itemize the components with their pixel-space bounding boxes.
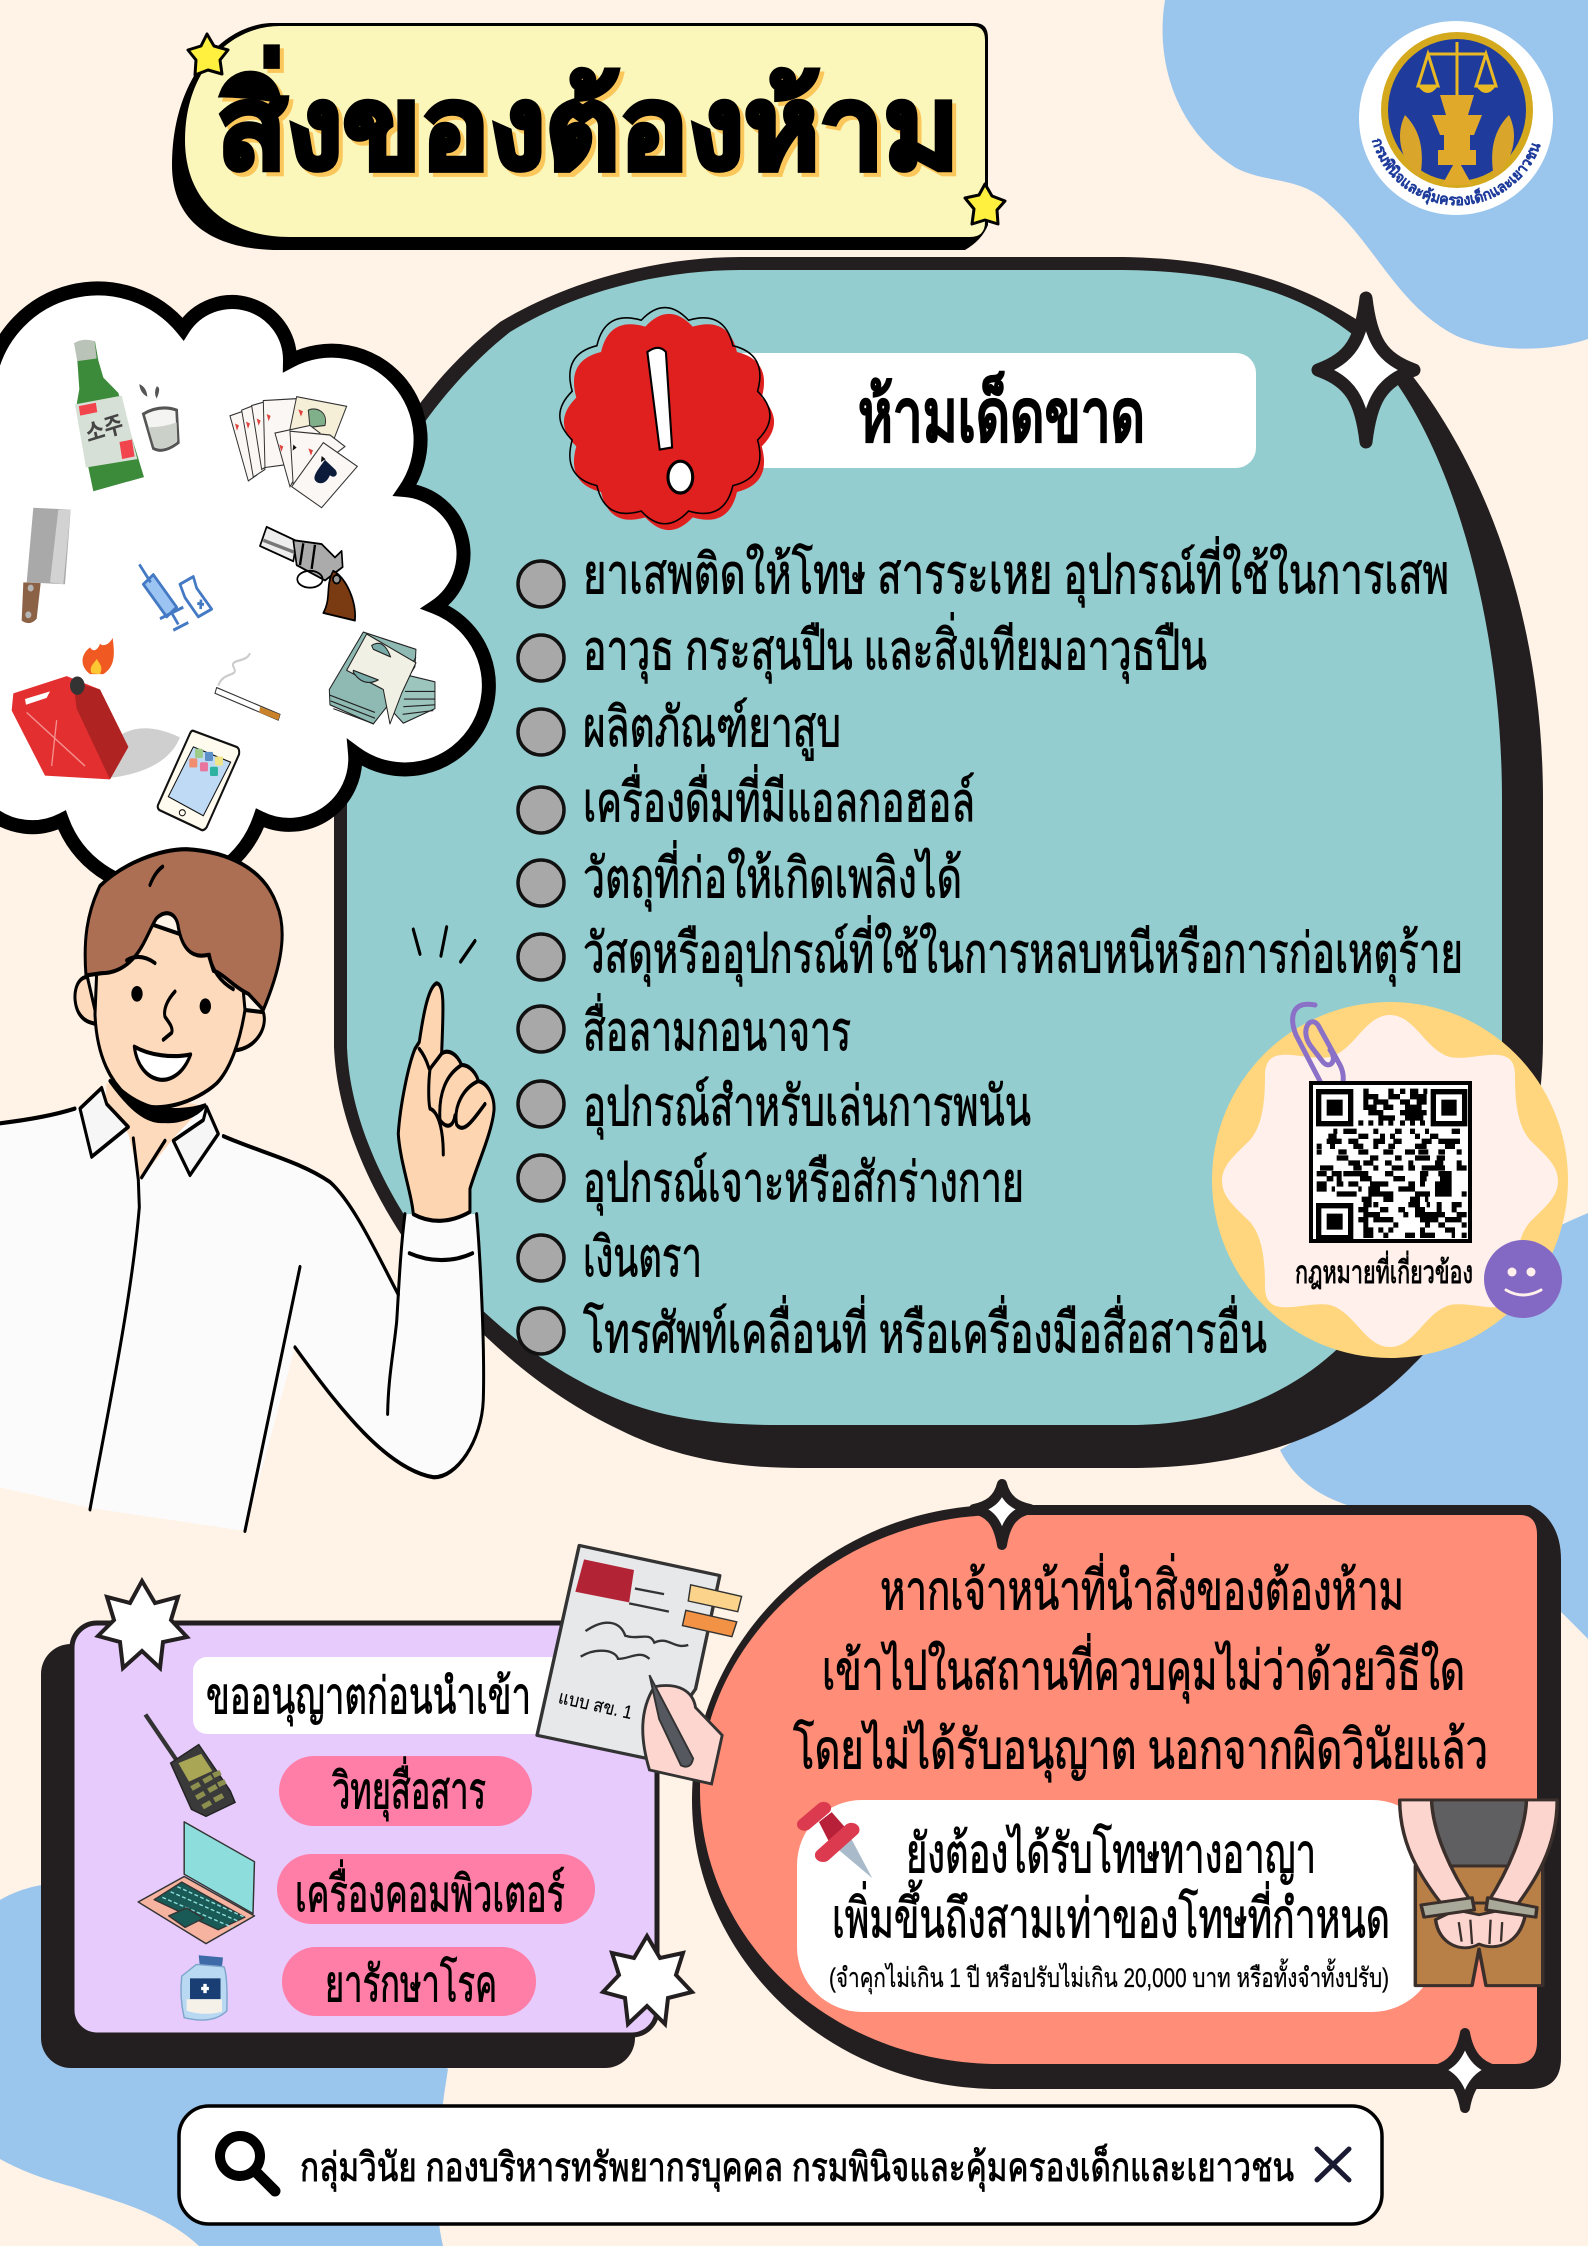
icon: smartphone [158,731,239,830]
icon: fuel can with flame [12,638,180,779]
illustration: signing form: แบบ สข. 1 [556,1688,634,1724]
thought cloud [0,288,489,889]
title text: สิ่งของต้องห้าม [221,51,963,197]
cloud icons [12,340,435,830]
mouth [134,1047,191,1080]
panel: permission request [41,1581,692,2068]
icon: paperclip [1293,1004,1343,1093]
icon: shot glass [139,384,178,450]
icon: cash stack [329,632,435,724]
list text: อุปกรณ์เจาะหรือสักร่างกาย [583,1151,1024,1216]
icon: playing cards [230,397,357,508]
icon: cigarette [215,653,280,720]
icon: smiley [1484,1240,1562,1318]
panel: penalty warning [692,1484,1561,2108]
man illustration [0,849,494,1531]
neck [105,1083,203,1180]
heading label [193,1657,578,1734]
hand [398,983,494,1221]
list text: วัตถุที่ก่อให้เกิดเพลิงได้ [583,840,962,912]
shirt lines [0,1109,484,1531]
icon: close x [1317,2149,1349,2180]
pill: medicine: ยารักษาโรค [325,1956,497,2012]
ears [75,977,98,1025]
decorative sparkle [1318,298,1414,442]
blue blob mid right [1280,1213,1588,1639]
star top left [98,1581,187,1668]
icon: revolver [260,527,355,621]
heading text: ห้ามเด็ดขาด [858,372,1145,457]
penalty text: ยังต้องได้รับโทษทางอาญา [906,1823,1316,1884]
icon: star right [965,184,1005,224]
QR badge [1212,1002,1568,1358]
title plate [172,23,1005,250]
icon: cleaver [22,508,71,623]
collar [80,1088,128,1157]
heading text: ขออนุญาตก่อนนำเข้า [206,1668,531,1726]
pill: computer: เครื่องคอมพิวเตอร์ [295,1860,565,1922]
heading pill [716,353,1256,468]
footer text: กลุ่มวินัย กองบริหารทรัพยากรบุคคล กรมพินิจและคุ้มครองเด็กและเยาวชน [300,2143,1294,2192]
icon: red exclamation burst [560,308,774,530]
list bullets [518,561,564,1354]
list text: เครื่องดื่มที่มีแอลกอฮอล์ [583,764,975,833]
QR code [1309,1081,1472,1243]
logo ring text: กรมพินิจและคุ้มครองเด็กและเยาวชน [1372,138,1541,206]
icon: walkie talkie [145,1714,235,1816]
illustration: handcuffed hands [1400,1800,1557,1986]
icon: medicine bottle [181,1955,227,2020]
pill: medicine [282,1947,536,2016]
finger lines [419,1049,485,1154]
list text: ผลิตภัณฑ์ยาสูบ [583,696,841,761]
pill: computer [277,1854,595,1924]
icon: push pin [804,1808,872,1878]
QR caption: กฎหมายที่เกี่ยวข้อง [1295,1251,1473,1290]
star bottom right [603,1936,692,2024]
eyes [131,986,143,1002]
emphasis ticks [413,927,475,962]
nose [163,992,175,1040]
icon: soju bottle: 소주 [83,410,126,448]
icon: laptop [138,1822,254,1944]
list text: โทรศัพท์เคลื่อนที่ หรือเครื่องมือสื่อสารอื่น [583,1295,1267,1364]
blue blob bottom left [0,1883,448,2246]
icon: syringe and vial [139,564,212,630]
blue blob top right [1163,0,1588,349]
pill: radio: วิทยุสื่อสาร [332,1757,486,1821]
pill: radio [279,1756,532,1826]
chin shadow [110,1081,205,1121]
list text: อาวุธ กระสุนปืน และสิ่งเทียมอาวุธปืน [583,612,1207,684]
penalty text: (จำคุกไม่เกิน 1 ปี หรือปรับไม่เกิน 20,000 บาท หรือทั้งจำทั้งปรับ) [829,1958,1389,1995]
warning text [793,1553,1488,1783]
penalty box [797,1800,1437,2012]
hair [85,849,282,1010]
list text: สื่อลามกอนาจาร [583,993,851,1062]
list text [583,536,1463,1364]
icon: magnifier [220,2136,275,2191]
logo seal [1359,21,1553,215]
penalty text [829,1823,1390,1995]
title text: สิ่งของต้องห้าม [217,47,959,193]
illustration: signing form [537,1545,742,1784]
panel: main prohibited list [334,257,1543,1468]
list text: เงินตรา [583,1226,702,1288]
sparkle bottom [1435,2033,1495,2108]
sparkle top [974,1484,1030,1545]
footer bar [179,2106,1382,2224]
shirt [0,1088,484,1531]
list text: อุปกรณ์สำหรับเล่นการพนัน [583,1075,1031,1140]
face [95,918,245,1107]
icon: soju bottle [74,340,144,491]
icon: star left [188,34,228,75]
